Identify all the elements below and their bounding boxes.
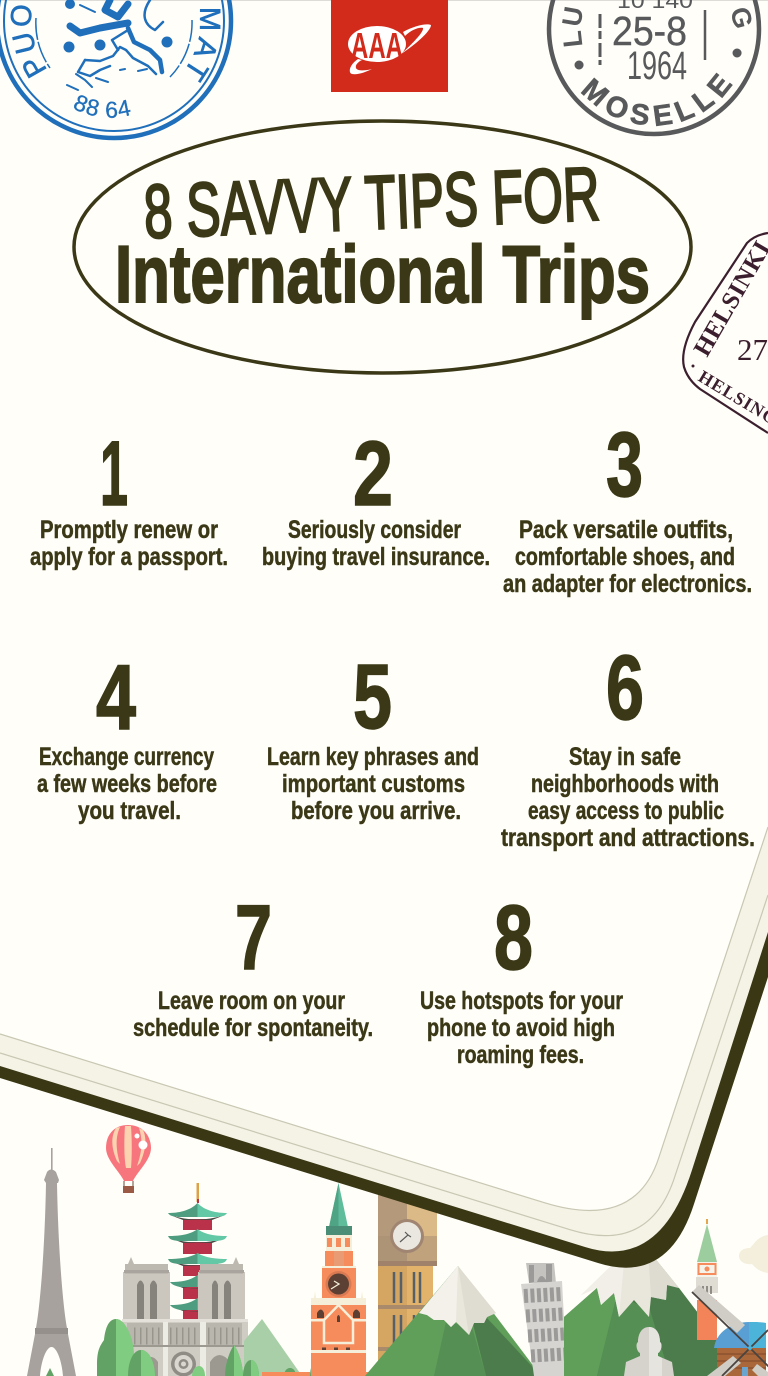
icon: leaning tower of Pisa xyxy=(521,1263,567,1376)
tip 3 xyxy=(503,414,752,598)
number 1: 1 xyxy=(100,423,128,525)
tip 5 text: important customs xyxy=(282,770,465,798)
icon: pale distant mountain xyxy=(244,1319,302,1376)
tip 7 text: schedule for spontaneity. xyxy=(133,1014,373,1042)
tip 6 text: neighborhoods with xyxy=(531,770,719,798)
number 5: 5 xyxy=(353,646,392,748)
tip 4 text: you travel. xyxy=(78,797,181,825)
logo swoosh xyxy=(350,24,431,74)
icon: hot air balloon xyxy=(106,1125,151,1193)
tip 5 text: before you arrive. xyxy=(291,797,461,825)
tip 6 text: Stay in safe xyxy=(569,743,681,771)
tip 1 text: apply for a passport. xyxy=(30,543,228,571)
tip 2 text: Seriously consider xyxy=(288,516,461,544)
icon: Eiffel Tower xyxy=(27,1148,76,1376)
tip 1 text: Promptly renew or xyxy=(40,516,218,544)
tip 8 text: roaming fees. xyxy=(457,1041,584,1069)
postmark LU text: LU xyxy=(562,6,582,46)
tip 8 xyxy=(420,887,623,1069)
postmark dots xyxy=(579,53,737,65)
title oval xyxy=(74,121,691,373)
number 4: 4 xyxy=(96,647,136,749)
stamp text PUO: PUO xyxy=(10,5,47,78)
tip 8 text xyxy=(420,987,623,1069)
icon: windmill xyxy=(692,1285,768,1376)
notebook middle page edge xyxy=(0,895,768,1236)
number 7: 7 xyxy=(235,887,272,989)
tip 2 text: buying travel insurance. xyxy=(262,543,490,571)
number 6: 6 xyxy=(606,637,644,739)
postmark MOSELLE text: MOSELLE xyxy=(580,72,733,126)
icon: castle wall xyxy=(262,1372,416,1376)
icon: snowy mountain right xyxy=(564,1240,768,1376)
tip 7 text: Leave room on your xyxy=(158,987,345,1015)
icon: Kremlin clock tower xyxy=(311,1183,366,1376)
icon: Buddha statue xyxy=(624,1327,674,1376)
tip 5 text: Learn key phrases and xyxy=(267,743,479,771)
icon: Big Ben tower xyxy=(378,1190,437,1376)
tip 4 text: a few weeks before xyxy=(37,770,217,798)
tip 4 xyxy=(37,647,217,825)
tip 6 xyxy=(501,637,755,852)
postmark date: 25-8 xyxy=(612,8,687,54)
title badge xyxy=(74,121,691,373)
skyline illustration xyxy=(27,1125,768,1376)
tip 2 xyxy=(262,423,490,571)
icon: Notre Dame cathedral xyxy=(122,1257,248,1376)
logo AAA letters: AAA xyxy=(351,25,403,66)
tip 5 text xyxy=(267,743,479,825)
tip 8 text: Use hotspots for your xyxy=(420,987,623,1015)
tip 1 xyxy=(30,423,228,571)
postmark year: 1964 xyxy=(627,44,687,88)
stamp: gray Moselle postmark xyxy=(546,0,762,136)
postmark G text: G xyxy=(724,4,759,32)
icon: Venetian bell tower xyxy=(696,1219,718,1340)
number 3: 3 xyxy=(606,414,643,516)
tip 6 text xyxy=(501,743,755,852)
number 8: 8 xyxy=(494,887,533,989)
logo: AAA xyxy=(331,0,448,92)
tip 1 text xyxy=(30,516,228,571)
stamp: Helsinki postmark xyxy=(683,233,768,456)
rosettes xyxy=(64,0,172,52)
tip 5 xyxy=(267,646,479,825)
notebook front page edge xyxy=(0,827,768,1210)
tip 2 text xyxy=(262,516,490,571)
tip 4 text xyxy=(37,743,217,825)
icon: pagoda xyxy=(168,1183,227,1320)
icon: cloud xyxy=(739,1235,768,1273)
stamp text MAT: MAT xyxy=(186,9,220,83)
number 2: 2 xyxy=(353,423,393,525)
tip 8 text: phone to avoid high xyxy=(427,1014,615,1042)
icon: trees xyxy=(46,1319,326,1376)
stamp: blue Finnish seal xyxy=(0,0,234,140)
tip 7 xyxy=(133,887,373,1042)
stamp text 88 64: 88 64 xyxy=(74,95,130,118)
lion emblem xyxy=(67,0,163,90)
tip 3 text xyxy=(503,516,752,598)
icon: snowy mountain left xyxy=(365,1266,541,1376)
tip 7 text xyxy=(133,987,373,1042)
tip 4 text: Exchange currency xyxy=(39,743,214,771)
